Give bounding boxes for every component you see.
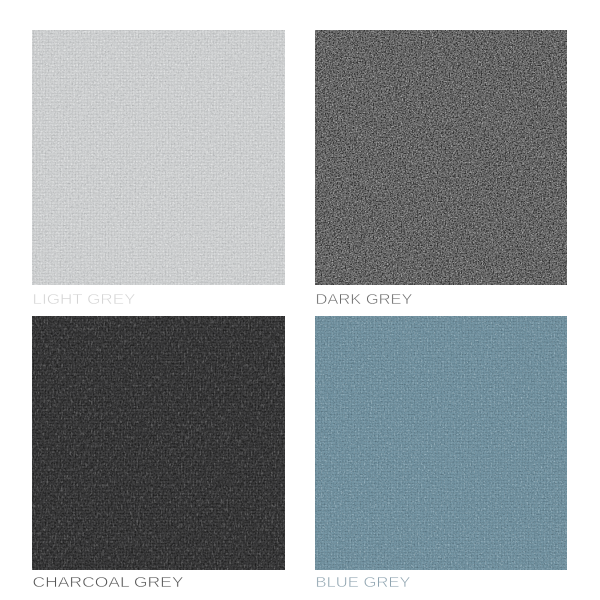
label: dark grey: DARK GREY <box>316 291 412 308</box>
label: light grey: LIGHT GREY <box>32 291 136 308</box>
label: blue grey: BLUE GREY <box>316 574 410 591</box>
label: charcoal grey: CHARCOAL GREY <box>32 574 184 591</box>
panel: blue grey swatch <box>315 316 567 570</box>
panel: light grey swatch <box>32 30 285 285</box>
panel: dark grey swatch <box>315 30 567 285</box>
panel: charcoal grey swatch <box>32 316 285 570</box>
